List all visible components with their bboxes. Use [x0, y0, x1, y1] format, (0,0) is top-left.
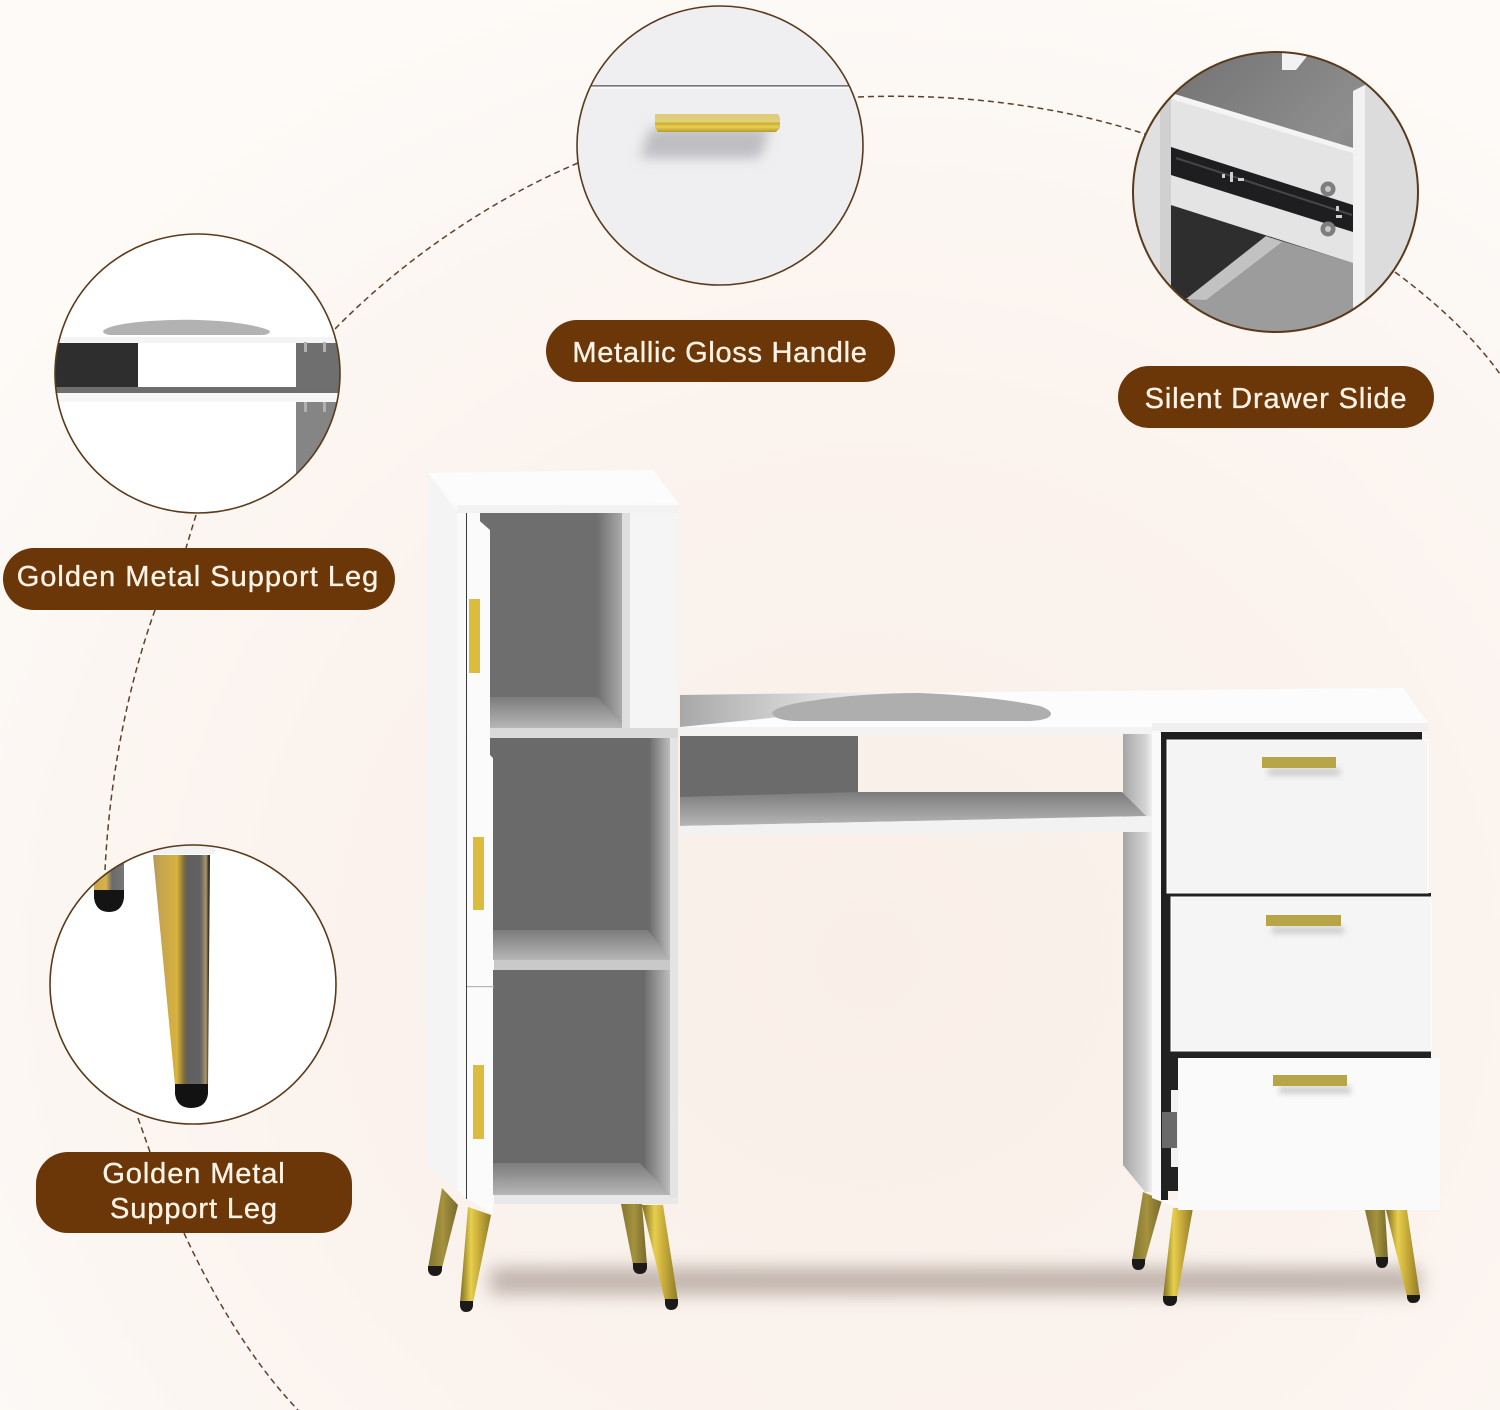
label: Golden Metal Support Leg (upper): Golden Metal Support Leg	[17, 561, 379, 593]
right drawer unit	[1123, 731, 1440, 1210]
detail circle: drawer slide	[1130, 50, 1420, 335]
label: Silent Drawer Slide: Silent Drawer Slide	[1145, 383, 1407, 415]
icon: gold handle	[655, 114, 780, 132]
left cabinet	[428, 470, 678, 1214]
detail circle: golden leg	[50, 845, 336, 1124]
label: Metallic Gloss Handle: Metallic Gloss Handle	[572, 337, 868, 369]
upper compartment	[480, 513, 678, 728]
label: Golden Metal Support Leg (lower): Golden Metal	[102, 1158, 286, 1190]
label: Golden Metal Support Leg (upper)	[3, 548, 395, 610]
big leg	[153, 845, 215, 1108]
floor shadow	[490, 1268, 1420, 1294]
label: Metallic Gloss Handle	[546, 320, 895, 382]
armrest pad	[772, 693, 1051, 721]
label: Golden Metal Support Leg (lower): Support Leg	[110, 1193, 278, 1225]
middle compartment	[490, 738, 670, 960]
product: manicure desk	[428, 470, 1440, 1312]
doors	[467, 515, 490, 745]
desk top and shelf	[680, 688, 1428, 835]
small foot	[94, 860, 124, 912]
drawers	[1167, 740, 1428, 893]
lower compartment	[490, 970, 670, 1195]
detail circle: metallic handle	[570, 0, 870, 290]
legs	[428, 1188, 1420, 1312]
label: Silent Drawer Slide	[1118, 366, 1434, 428]
label: Golden Metal Support Leg (lower)	[36, 1152, 352, 1233]
detail circle: armrest shelf	[50, 234, 342, 517]
